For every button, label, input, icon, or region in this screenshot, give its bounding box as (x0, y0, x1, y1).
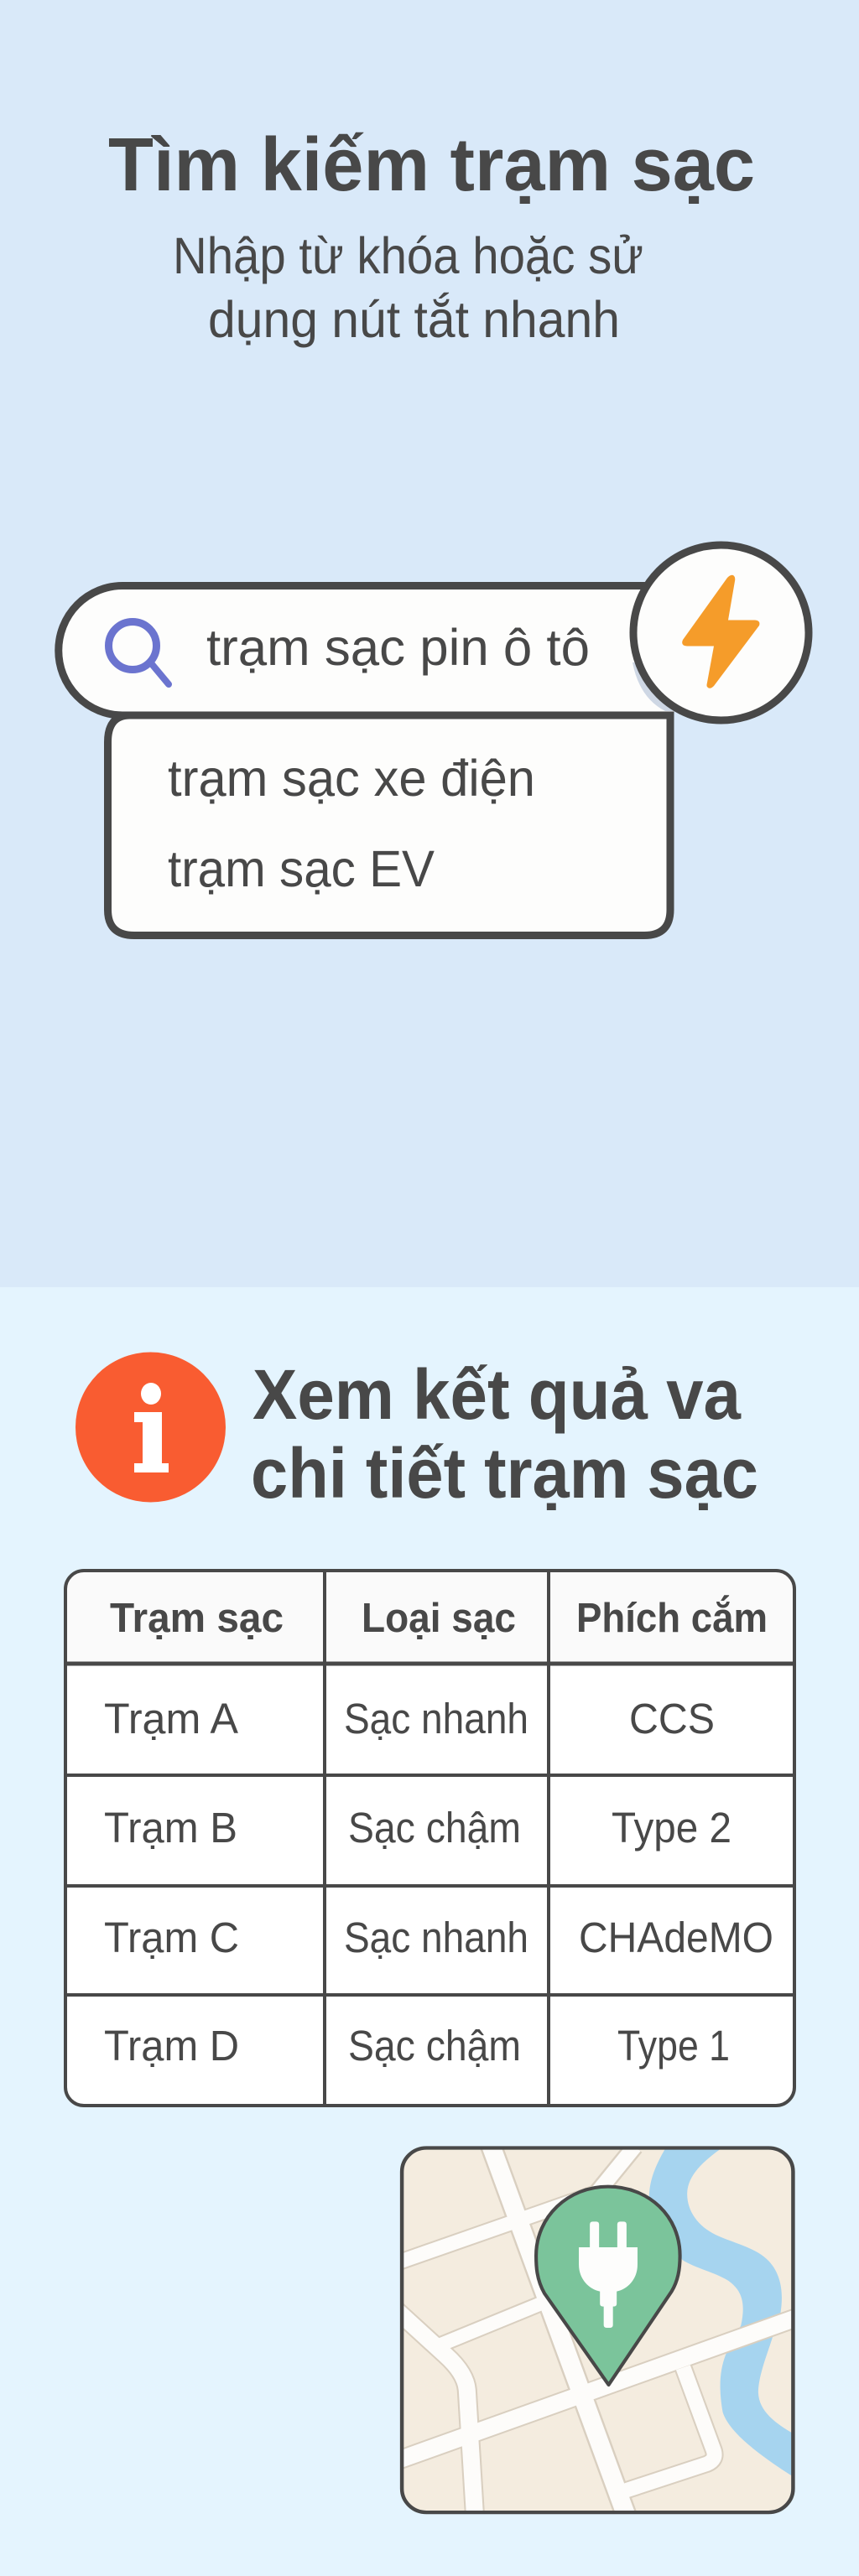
table: charging stations (65, 1571, 794, 2106)
table header row (110, 1595, 768, 1641)
subtitle: dụng nút tắt nhanh (208, 291, 620, 348)
river (649, 2147, 795, 2478)
table header row: Phích cắm (576, 1595, 768, 1641)
suggestion dropdown (107, 715, 670, 936)
icon: magnifier (109, 622, 169, 684)
table row D: Trạm D (104, 2022, 239, 2070)
table row C (104, 1914, 773, 1961)
table row A (104, 1695, 715, 1742)
title: Tìm kiếm trạm sạc (108, 123, 755, 207)
table row D: Sạc chậm (348, 2022, 521, 2070)
subtitle: Nhập từ khóa hoặc sử (173, 227, 643, 284)
table row B: Sạc chậm (348, 1804, 521, 1852)
icon: lightning bolt (682, 575, 759, 688)
table header row: Loại sạc (362, 1596, 516, 1641)
suggestion dropdown: trạm sạc xe điện (168, 750, 535, 807)
table row C: CHAdeMO (579, 1914, 773, 1961)
table row B: Trạm B (104, 1804, 237, 1852)
section heading: chi tiết trạm sạc (251, 1434, 758, 1513)
table header row: Trạm sạc (110, 1596, 284, 1641)
table row C: Trạm C (104, 1914, 239, 1961)
section heading (251, 1355, 758, 1513)
table row A: CCS (629, 1695, 715, 1742)
table row B (104, 1804, 731, 1852)
table row A: Trạm A (104, 1695, 238, 1742)
map panel (395, 2141, 802, 2521)
search bar: trạm sạc pin ô tô (206, 619, 590, 676)
road casings (395, 2141, 802, 2521)
subtitle (173, 227, 643, 348)
panel: results section background (0, 1287, 859, 2576)
suggestion dropdown: trạm sạc EV (168, 840, 435, 897)
icon: info (75, 1352, 226, 1503)
search bar (59, 585, 674, 715)
icon: map pin with plug (536, 2187, 680, 2385)
search widget (59, 545, 809, 936)
table row D (104, 2022, 730, 2070)
table row B: Type 2 (612, 1804, 731, 1852)
table row D: Type 1 (617, 2022, 730, 2070)
table row C: Sạc nhanh (344, 1914, 528, 1961)
roads (395, 2141, 802, 2521)
panel: search section background (0, 0, 859, 1287)
quick shortcut button (633, 545, 809, 720)
section heading: Xem kết quả va (252, 1355, 742, 1434)
table row A: Sạc nhanh (344, 1695, 528, 1742)
